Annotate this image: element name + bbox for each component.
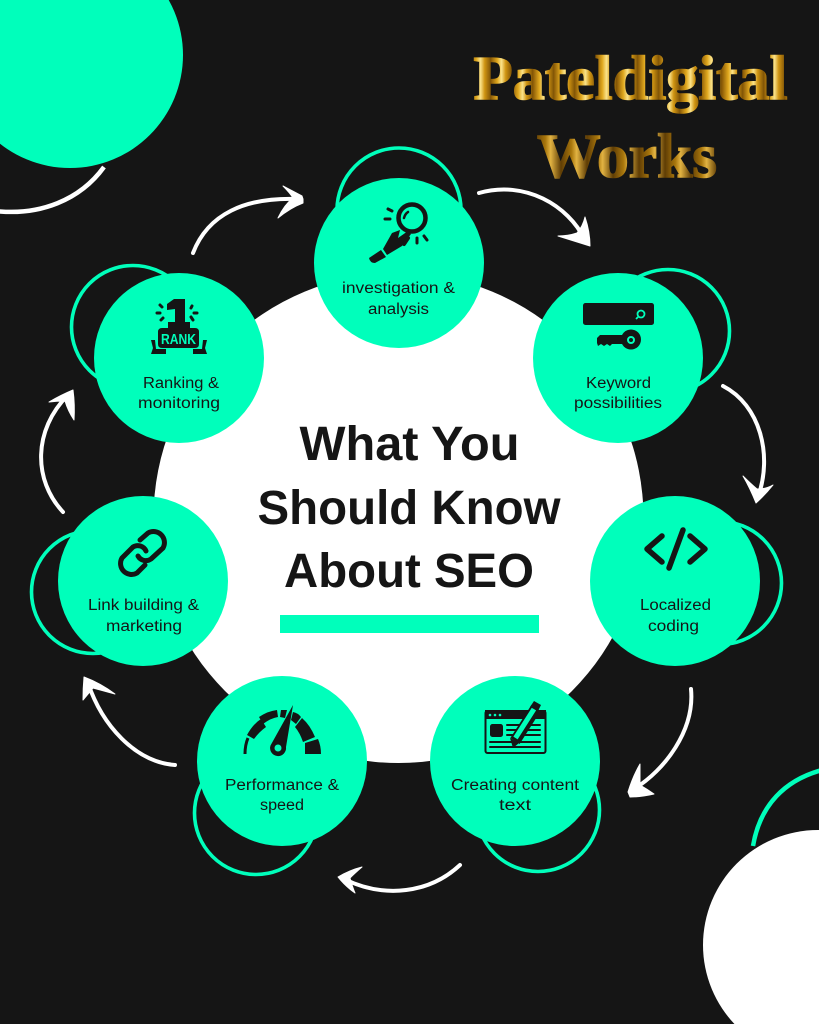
title underline bar <box>280 615 539 633</box>
icon: browser with pen <box>485 701 546 753</box>
node: investigation and analysis <box>314 148 484 348</box>
label: analysis <box>368 301 429 318</box>
label: Creating content <box>451 777 580 794</box>
label <box>451 777 580 814</box>
icon: code brackets <box>647 530 705 568</box>
title: About SEO <box>284 545 534 598</box>
label <box>138 375 220 412</box>
central white circle <box>154 273 644 763</box>
label <box>88 597 200 635</box>
icon: rank one badge: RANK <box>161 332 196 348</box>
node: keyword possibilities <box>533 270 730 443</box>
icon: speedometer gauge <box>245 705 321 756</box>
label <box>574 375 662 412</box>
brand logo text: Works <box>537 123 717 191</box>
label: investigation & <box>342 280 456 297</box>
icon: search bar and key <box>583 303 654 350</box>
label: Localized <box>640 597 711 614</box>
icon: magnifier in hand <box>369 204 427 263</box>
label: Link building & <box>88 597 200 614</box>
title: Should Know <box>258 482 561 535</box>
brand logo text: Pateldigital <box>474 45 788 113</box>
label: speed <box>260 797 304 814</box>
label: Ranking & <box>143 375 220 392</box>
label: monitoring <box>138 395 220 412</box>
node: localized coding <box>590 496 782 666</box>
label: Keyword <box>586 375 651 392</box>
label <box>640 597 711 635</box>
label: marketing <box>106 618 182 635</box>
label: Performance & <box>225 777 340 794</box>
arrow: localized to creating <box>628 689 691 797</box>
arrow: performance to link building <box>83 677 175 765</box>
label <box>342 280 456 318</box>
arrow: ranking to investigation <box>193 186 303 253</box>
node: link building and marketing <box>32 496 228 666</box>
node: performance and speed <box>194 676 367 874</box>
title: What You <box>300 418 520 471</box>
node: creating content text <box>430 676 600 872</box>
decoration: bottom-right circle and ring <box>703 770 819 1024</box>
brand logo text <box>474 45 788 191</box>
arrow: link building to ranking <box>41 390 74 512</box>
label: possibilities <box>574 395 662 412</box>
arrow: keyword to localized <box>723 386 773 503</box>
title <box>258 418 561 598</box>
icon: chain link <box>121 532 164 574</box>
arrow: investigation to keyword <box>479 190 590 246</box>
label: coding <box>648 618 699 635</box>
label <box>225 777 340 814</box>
arrow: creating to performance <box>338 865 460 893</box>
node: ranking and monitoring <box>72 266 264 443</box>
decoration: top-left circle and ring <box>0 0 183 212</box>
label: text <box>499 797 532 814</box>
icon: rank one badge <box>151 299 207 354</box>
